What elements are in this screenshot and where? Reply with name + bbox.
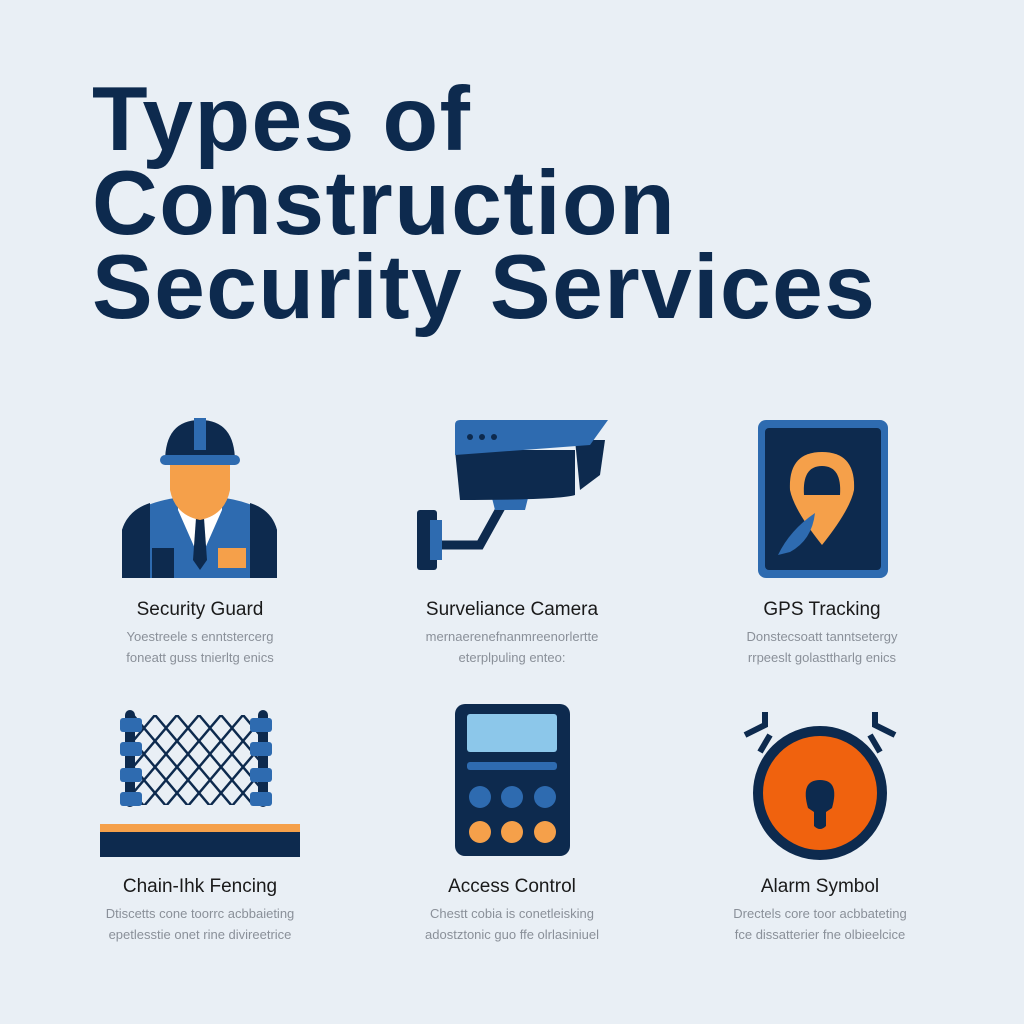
icon: chain-link fencing [100, 710, 300, 857]
desc: fencing: epetlesstie onet rine divireetrice [109, 927, 291, 942]
title [92, 69, 876, 338]
desc: surveillance camera [426, 629, 598, 665]
desc: fencing [106, 906, 294, 942]
desc: alarm: fce dissatterier fne olbieelcice [735, 927, 905, 942]
label: alarm: Alarm Symbol [761, 876, 879, 897]
desc: access control: adostztonic guo ffe olrlasiniuel [425, 927, 599, 942]
label: surveillance camera: Surveliance Camera [426, 599, 598, 620]
label: access control: Access Control [448, 876, 576, 897]
icon: access control [455, 704, 570, 856]
title: Construction [92, 153, 676, 254]
icon: alarm [744, 712, 896, 860]
desc: gps tracking: Donstecsoatt tanntsetergy [746, 629, 898, 644]
title: Security Services [92, 237, 876, 338]
desc: surveillance camera: eterplpuling enteo: [458, 650, 565, 665]
desc: alarm [733, 906, 907, 942]
desc: security guard: Yoestreele s enntstercerg [127, 629, 273, 644]
icon: surveillance camera [417, 420, 608, 570]
desc: surveillance camera: mernaerenefnanmreenorlertte [426, 629, 598, 644]
desc: alarm: Drectels core toor acbbateting [733, 906, 907, 921]
desc: access control [425, 906, 599, 942]
icon: security guard [122, 418, 277, 578]
label: gps tracking: GPS Tracking [763, 599, 881, 620]
desc: gps tracking: rrpeeslt golasttharlg enics [748, 650, 896, 665]
label: security guard: Security Guard [137, 599, 263, 620]
title: Types of [92, 69, 471, 170]
desc: gps tracking [746, 629, 898, 665]
desc: security guard: foneatt guss tnierltg enics [126, 650, 274, 665]
desc: access control: Chestt cobia is conetleisking [430, 906, 594, 921]
desc: security guard [126, 629, 274, 665]
label: fencing: Chain-Ihk Fencing [123, 876, 277, 897]
desc: fencing: Dtiscetts cone toorrc acbbaieting [106, 906, 294, 921]
icon: gps tracking [758, 420, 888, 578]
